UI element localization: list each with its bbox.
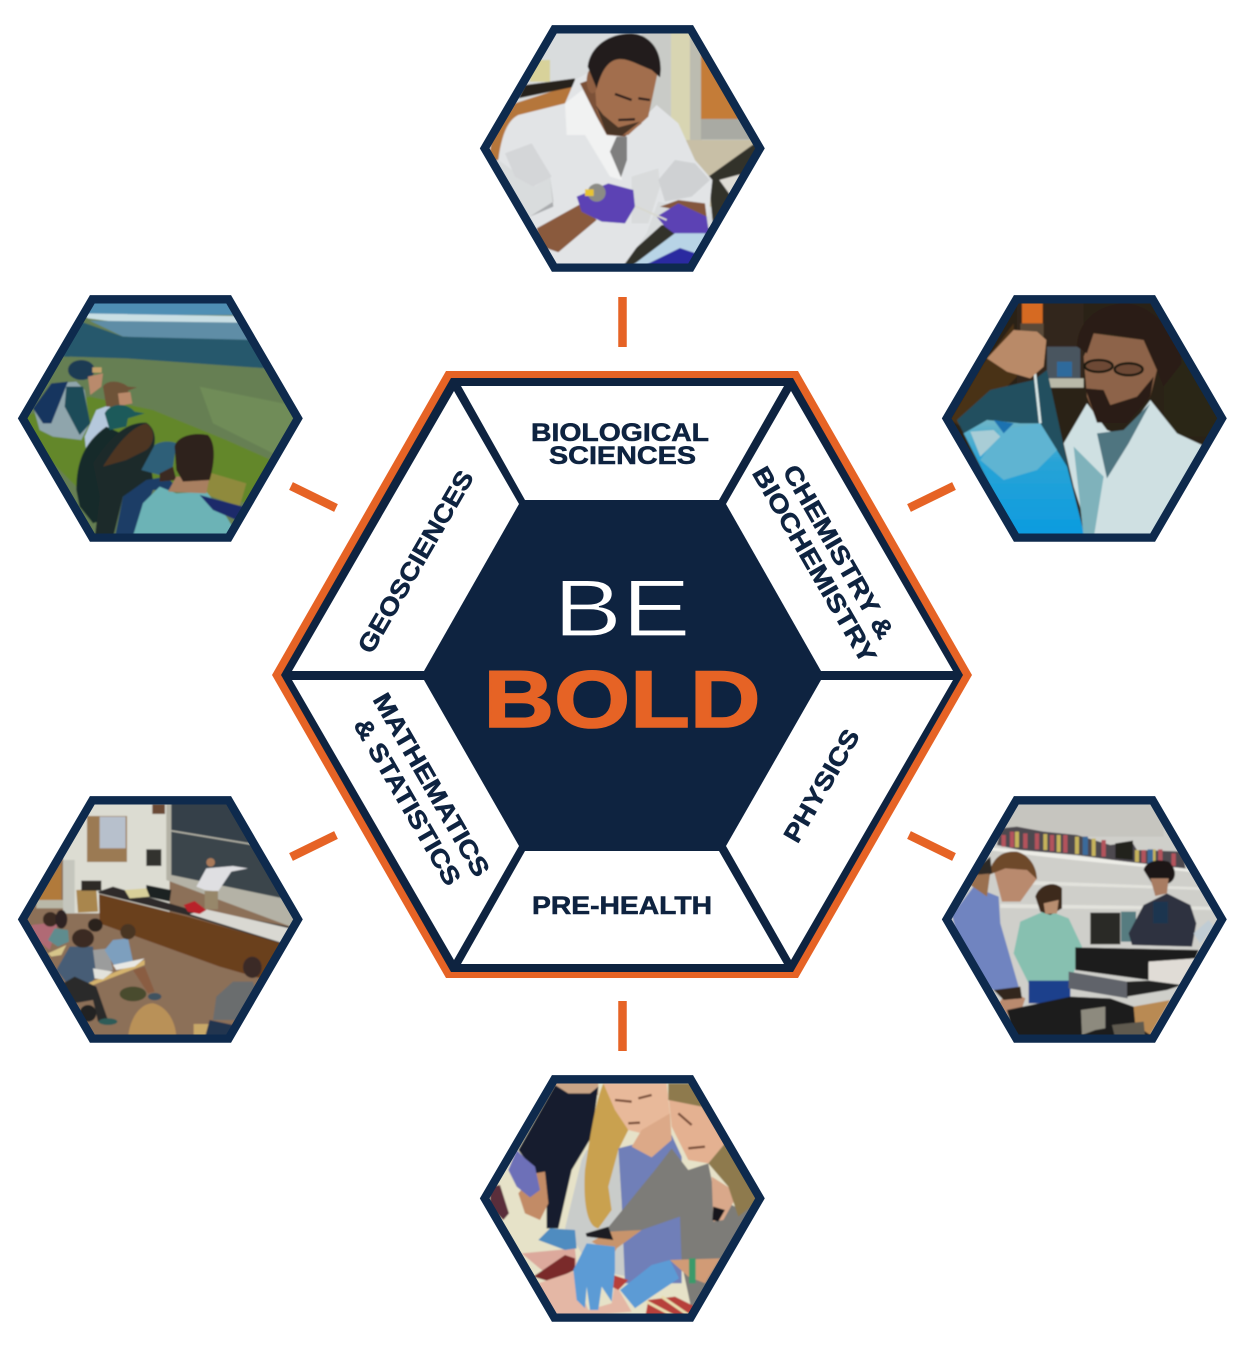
segment: physics xyxy=(726,680,953,960)
photo: geosciences students on a hillside xyxy=(13,290,308,550)
label: mathematics and statistics xyxy=(348,688,495,890)
hexagon frame xyxy=(23,299,298,538)
navy hexagon body xyxy=(281,378,963,972)
segment: geosciences xyxy=(292,391,519,671)
label: biological sciences xyxy=(531,419,709,470)
segment: pre-health xyxy=(461,851,784,964)
label: geosciences: GEOSCIENCES xyxy=(352,466,480,658)
segment: chemistry and biochemistry xyxy=(726,391,953,671)
photo: biological sciences researcher with pipette xyxy=(475,20,770,280)
label: pre-health: PRE-HEALTH xyxy=(532,892,712,920)
photo: physics lab group xyxy=(937,790,1232,1050)
segment: mathematics and statistics xyxy=(292,680,519,960)
photo scene xyxy=(490,34,756,264)
connector ticks xyxy=(291,297,954,1051)
hexagon frame xyxy=(23,800,298,1039)
photo scene xyxy=(490,1084,756,1314)
label: chemistry and biochemistry: CHEMISTRY & xyxy=(777,460,899,644)
photo scene xyxy=(952,804,1218,1034)
hexagon frame xyxy=(485,1079,760,1318)
label: physics: PHYSICS xyxy=(778,724,866,848)
photo scene xyxy=(952,304,1218,534)
label: mathematics and statistics: & STATISTICS xyxy=(348,714,466,890)
label: chemistry and biochemistry xyxy=(746,460,899,668)
title: BE: BE xyxy=(554,564,690,654)
hexagon frame xyxy=(947,299,1222,538)
photo: chemistry researcher with glowing blue flask xyxy=(937,290,1232,550)
central hexagon diagram xyxy=(272,371,972,978)
title: BOLD: BOLD xyxy=(484,655,760,745)
hexagon frame xyxy=(485,29,760,268)
photo: mathematics lecture hall xyxy=(13,790,308,1050)
label: mathematics and statistics: MATHEMATICS xyxy=(367,688,495,882)
label: biological sciences: BIOLOGICAL xyxy=(531,419,709,447)
orange outer border xyxy=(272,371,972,978)
photo scene xyxy=(28,804,294,1034)
photo scene xyxy=(28,304,294,534)
hexagon frame xyxy=(947,800,1222,1039)
label: chemistry and biochemistry: BIOCHEMISTRY xyxy=(746,462,882,668)
label: biological sciences: SCIENCES xyxy=(549,442,696,470)
photo: pre-health students in dissection lab xyxy=(475,1070,770,1330)
segment: biological sciences xyxy=(461,386,784,500)
